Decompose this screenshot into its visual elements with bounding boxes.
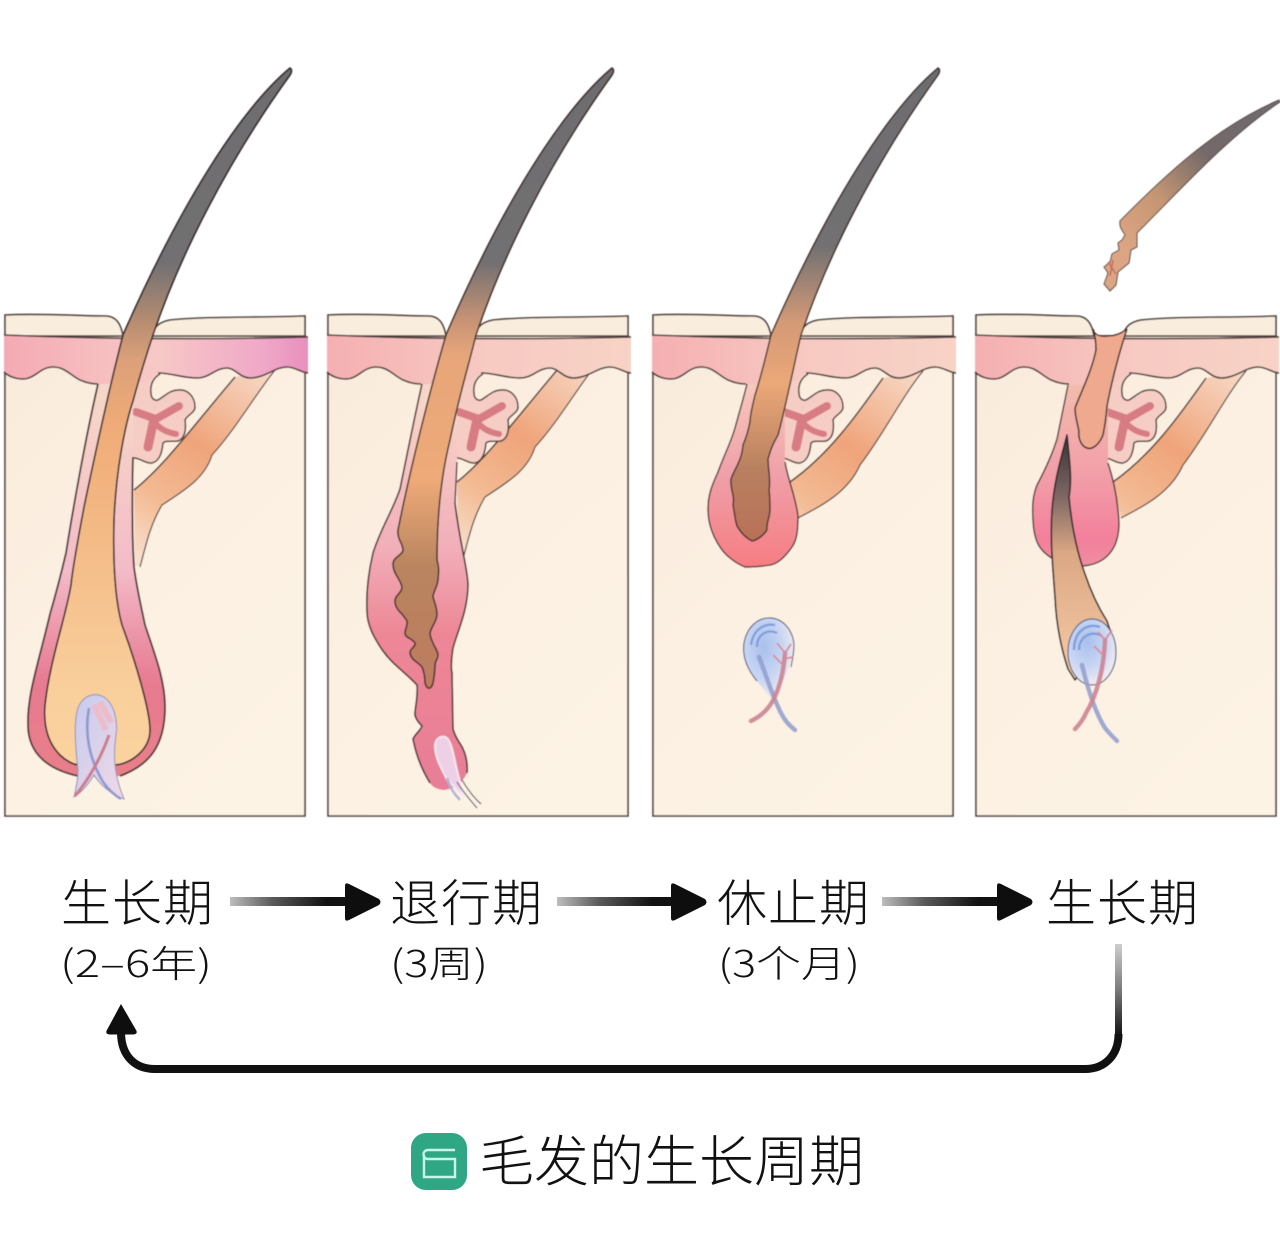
hair shaft and club <box>393 68 614 688</box>
arrector muscle <box>790 371 923 518</box>
icon: green book badge <box>411 1133 467 1190</box>
arrow: regression to resting <box>557 883 706 921</box>
title: 毛发的生长周期 <box>479 1117 864 1197</box>
duration: 2 to 6 years: (2–6年) <box>60 934 212 988</box>
sebaceous gland <box>781 374 843 463</box>
stage label: growth phase: 生长期 <box>61 864 214 936</box>
duration: 3 months: (3个月) <box>718 934 860 988</box>
icon: shed hair fragment <box>1104 100 1280 291</box>
arrow: growth to regression <box>230 883 380 921</box>
panel: telogen resting stage <box>652 68 956 816</box>
skin band <box>327 335 631 385</box>
stage label: resting phase <box>717 864 870 988</box>
follicle sheath <box>708 384 798 567</box>
stage label: resting phase: 休止期 <box>717 864 870 936</box>
duration: 3 weeks: (3周) <box>390 934 488 988</box>
arrow: cycle return loop <box>107 944 1122 1069</box>
stage label: growth phase <box>60 864 214 988</box>
skin band <box>975 335 1279 385</box>
arrector muscle <box>457 362 598 559</box>
stage label: regression phase: 退行期 <box>390 864 543 936</box>
follicle sheath <box>1033 385 1119 566</box>
emptied old hair canal <box>1075 329 1127 448</box>
sebaceous gland <box>1104 374 1166 463</box>
hair shaft and club <box>731 68 940 541</box>
sebaceous gland <box>133 374 195 463</box>
follicle sheath <box>367 384 468 790</box>
stage label: growth phase again: 生长期 <box>1046 864 1199 936</box>
sebaceous gland <box>456 374 518 463</box>
panel: catagen regression stage <box>327 68 631 816</box>
hair papilla <box>74 695 124 799</box>
arrector muscle <box>1113 371 1246 518</box>
detached papilla <box>744 618 795 730</box>
arrow: resting to growth <box>882 883 1032 921</box>
skin band <box>652 335 956 385</box>
hair shaft and bulb <box>45 68 292 765</box>
panel: new anagen with shedding hair <box>975 314 1279 816</box>
shrunken papilla <box>435 737 481 808</box>
skin band <box>4 335 308 385</box>
papilla under new hair <box>1068 619 1117 741</box>
panel: anagen growth stage <box>4 68 308 816</box>
new growing hair <box>1051 435 1110 680</box>
stage label: regression phase <box>390 864 543 988</box>
follicle sheath <box>28 384 165 777</box>
arrector muscle <box>134 370 275 567</box>
